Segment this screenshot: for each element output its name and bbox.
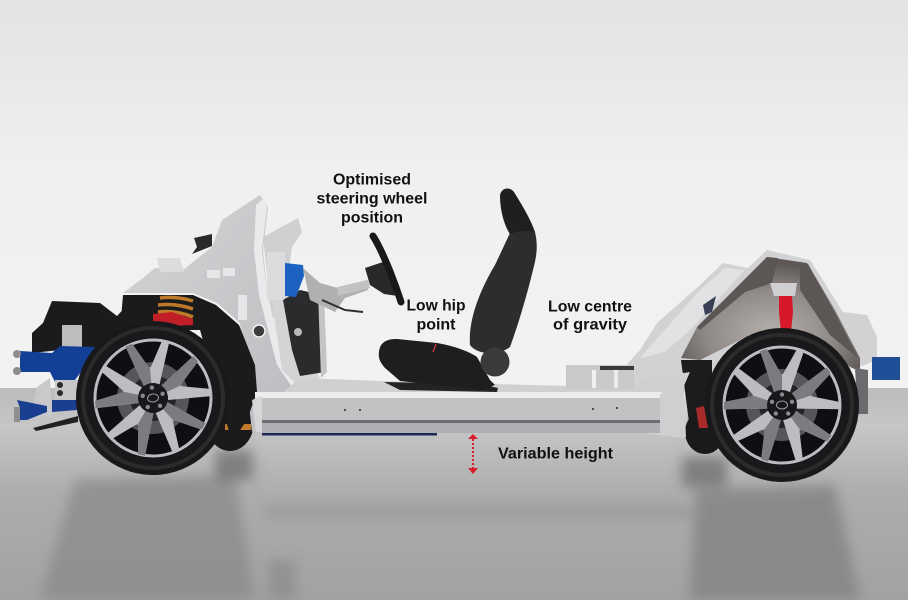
rear perforated panel: [652, 379, 675, 397]
silver vertical bracket: [318, 292, 327, 378]
inner pillar highlight: [254, 198, 303, 390]
rear light panel: [640, 268, 745, 358]
small rear window: [703, 296, 716, 315]
top lump: [157, 258, 184, 272]
dark sill groove: [258, 420, 683, 423]
firewall and pedal cavity: [267, 252, 368, 388]
front wheel: [68, 313, 238, 483]
rear inner wheel house: [681, 257, 860, 372]
steering column: [337, 280, 370, 296]
label: optimised steering wheel position: Optimised: [333, 172, 411, 188]
seat pivot: [480, 348, 510, 376]
rear inner tyre: [685, 410, 725, 454]
silver bracket: [62, 325, 82, 347]
side bracket box: [267, 252, 285, 300]
body access hole: [253, 325, 265, 337]
steering rim: [373, 236, 401, 302]
arrow: variable height: [468, 434, 478, 474]
panel detail: [207, 268, 247, 320]
label: low centre of gravity: [548, 298, 632, 334]
background wall: [0, 0, 908, 388]
label: optimised steering wheel position: steering wheel: [316, 190, 428, 208]
red suspension arm: [696, 406, 708, 428]
front inner tyre: [206, 393, 254, 451]
sill rivets: [344, 407, 618, 411]
front body shell: [120, 195, 305, 442]
label: optimised steering wheel position: [316, 172, 428, 226]
upper cowl dark slot: [192, 234, 212, 254]
rear wheel well shadow: [681, 360, 712, 435]
rear outer silver structure: [620, 250, 877, 438]
seat cushion: [379, 339, 495, 390]
steering wheel: [337, 236, 401, 302]
black frame: [32, 300, 132, 353]
rear damper cap: [770, 283, 797, 296]
floor pan: [280, 372, 690, 395]
blue underbody strip: [262, 433, 437, 436]
label: low centre of gravity: Low centre: [548, 298, 632, 316]
front lower bracket: [33, 416, 78, 431]
front crash structure: [13, 300, 132, 431]
sill rear flare: [660, 372, 686, 437]
bumper end cap: [14, 407, 20, 422]
label: variable height: Variable height: [498, 446, 614, 462]
lower firewall silver: [272, 300, 320, 388]
silver plate with holes: [55, 380, 79, 402]
firewall upper panel: [263, 218, 302, 320]
rear wheel: [705, 328, 859, 482]
dark cavity: [283, 290, 325, 376]
floor: [0, 388, 908, 600]
label: low hip point: [406, 298, 466, 334]
label: low hip point: Low hip: [406, 298, 466, 314]
driver seat: [379, 189, 537, 392]
rear battery and tank unit: [566, 365, 634, 389]
floor reflections: [40, 450, 860, 600]
front lower orange part: [225, 424, 251, 430]
lower blue bumper: [17, 400, 47, 420]
dial detail: [294, 328, 302, 336]
upper sill: [255, 392, 685, 398]
lower silver support: [30, 378, 52, 420]
blue crossmember: [20, 346, 95, 382]
front bolts: [13, 350, 21, 375]
sill front flare: [252, 396, 262, 432]
wheel arch shadow: [120, 295, 257, 442]
label: optimised steering wheel position: position: [341, 210, 403, 226]
blue pedal block: [285, 263, 304, 297]
rear body shell: [620, 250, 900, 454]
headrest: [500, 189, 535, 234]
label: low hip point: point: [416, 316, 456, 334]
seat rails: [384, 382, 498, 392]
floor and side sill: [252, 372, 690, 437]
lower sill: [262, 423, 683, 433]
mid sill: [255, 398, 683, 420]
seat backrest: [470, 230, 537, 353]
steering linkage: [322, 300, 363, 312]
rear arch dark top band: [697, 257, 778, 330]
steering column bracket: [303, 268, 368, 312]
steering hub: [365, 262, 398, 296]
spring: orange coils: [158, 297, 193, 317]
main silver body panel: [123, 195, 305, 432]
red rear damper: [779, 296, 793, 332]
label: low centre of gravity: of gravity: [553, 316, 627, 334]
rear right tail dark: [855, 368, 868, 414]
damper: red: [153, 312, 193, 326]
rear bumper blue box: [872, 357, 900, 380]
seat red accent: [433, 344, 436, 352]
